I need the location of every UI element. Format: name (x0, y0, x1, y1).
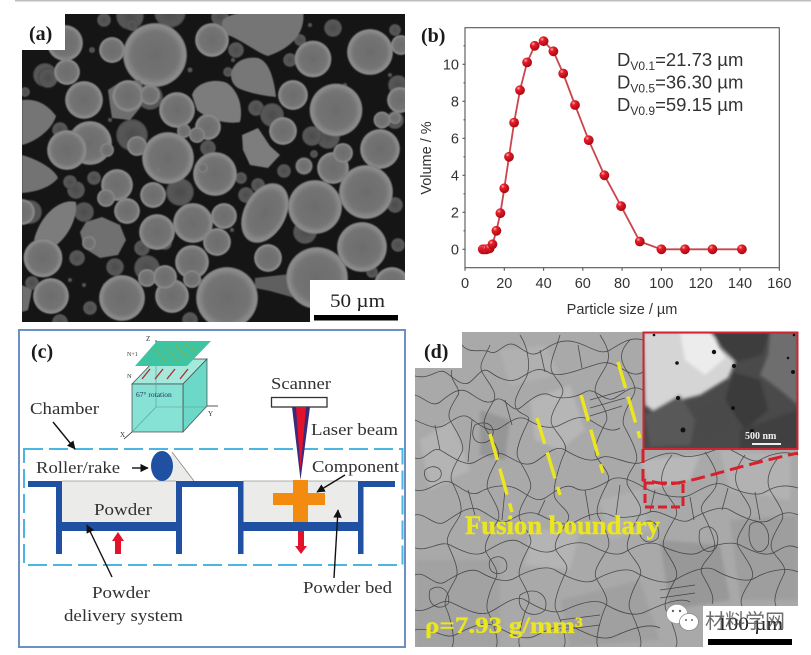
D-values annotation (617, 49, 743, 118)
powder delivery and build cylinders (28, 481, 395, 554)
labels in schematic: Laser beam (311, 420, 398, 439)
cube inset (120, 335, 218, 439)
inset TEM image: 500 nm (745, 431, 777, 442)
x axis labels: 100 (649, 276, 674, 292)
cube inset: X (120, 431, 125, 439)
powder fill (62, 452, 358, 523)
y axis labels: 2 (451, 206, 459, 222)
x axis labels: 0 (461, 276, 469, 292)
density text: ρ=7.93 g/mm³ (425, 613, 583, 638)
labels in schematic: Powder (94, 500, 153, 519)
label (a): (a) (29, 23, 52, 45)
connecting neck (254, 274, 293, 298)
grain boundaries (415, 335, 798, 647)
D-values annotation: D (617, 72, 630, 92)
laser beam (292, 407, 310, 480)
y axis labels: 10 (443, 58, 459, 74)
D-values annotation: =59.15 µm (655, 94, 743, 115)
y axis title: Volume / % (419, 121, 435, 195)
D-values annotation: V0.9 (630, 104, 655, 118)
x axis labels: 60 (575, 276, 591, 292)
labels in schematic: Scanner (271, 374, 332, 393)
labels in schematic (30, 374, 399, 625)
cube inset: N+1 (127, 352, 138, 358)
component cross (273, 480, 325, 522)
icon: wechat logo (666, 604, 698, 630)
cube inset: Y (208, 410, 213, 418)
y axis labels: 4 (451, 168, 459, 184)
x axis title: Particle size / µm (567, 302, 677, 318)
x axis labels: 160 (767, 276, 791, 292)
inset TEM image (643, 332, 798, 449)
callout arrows (53, 422, 345, 578)
D-values annotation: D (617, 49, 630, 70)
y axis labels: 8 (451, 94, 459, 110)
cube inset: N (127, 373, 132, 380)
build chamber dashed outline (24, 449, 402, 565)
fusion boundary text: Fusion boundary (465, 511, 660, 540)
D-values annotation: =21.73 µm (655, 49, 743, 70)
D-values annotation: D (617, 94, 630, 115)
label (c): (c) (31, 341, 53, 363)
labels in schematic: Component (312, 457, 399, 476)
scale bar 100 µm with watermark: 材料学网 (705, 610, 785, 633)
plot frame (462, 28, 779, 271)
panel c: powder bed schematic (19, 330, 405, 647)
data line (483, 41, 742, 249)
cube inset: Z (146, 335, 150, 343)
y axis labels: 0 (451, 242, 459, 258)
scale bar 100 µm with watermark: 100 µm (717, 614, 783, 635)
labels in schematic: Chamber (30, 399, 100, 418)
x axis labels: 120 (689, 276, 713, 292)
scanner (272, 398, 327, 407)
cube inset: 67° rotation (136, 390, 172, 399)
y axis labels (443, 58, 459, 258)
labels in schematic: Roller/rake (36, 458, 120, 477)
scale bar 50 µm (310, 280, 406, 323)
roller (151, 451, 173, 481)
scale bar 50 µm: 50 µm (330, 291, 385, 312)
D-values annotation: =36.30 µm (655, 72, 743, 92)
top rule (15, 0, 811, 2)
grain tones (422, 386, 797, 644)
x axis labels (461, 276, 791, 292)
x axis labels: 40 (536, 276, 552, 292)
D-values annotation: V0.5 (630, 82, 655, 96)
scale bar 100 µm with watermark (703, 606, 799, 648)
labels in schematic: Powder bed (303, 578, 393, 597)
fusion boundary lines (490, 362, 640, 512)
label (b): (b) (421, 25, 445, 47)
D-values annotation: V0.1 (630, 59, 655, 73)
piston arrows (112, 531, 307, 554)
panel d: EBSD microstructure (415, 332, 799, 648)
labels in schematic: delivery system (64, 606, 183, 625)
panel b: particle size chart (419, 25, 791, 318)
panel a: SEM micrograph of powder (22, 14, 405, 322)
labels in schematic: Powder (92, 583, 151, 602)
x axis labels: 20 (496, 276, 512, 292)
label (d): (d) (424, 341, 448, 363)
label (a) (21, 14, 65, 50)
data points (478, 36, 747, 254)
x axis labels: 140 (728, 276, 752, 292)
zoom region box and leader lines (643, 449, 798, 507)
label (d) (415, 332, 462, 368)
x axis labels: 80 (614, 276, 630, 292)
panel border (19, 330, 405, 647)
y axis labels: 6 (451, 132, 459, 148)
